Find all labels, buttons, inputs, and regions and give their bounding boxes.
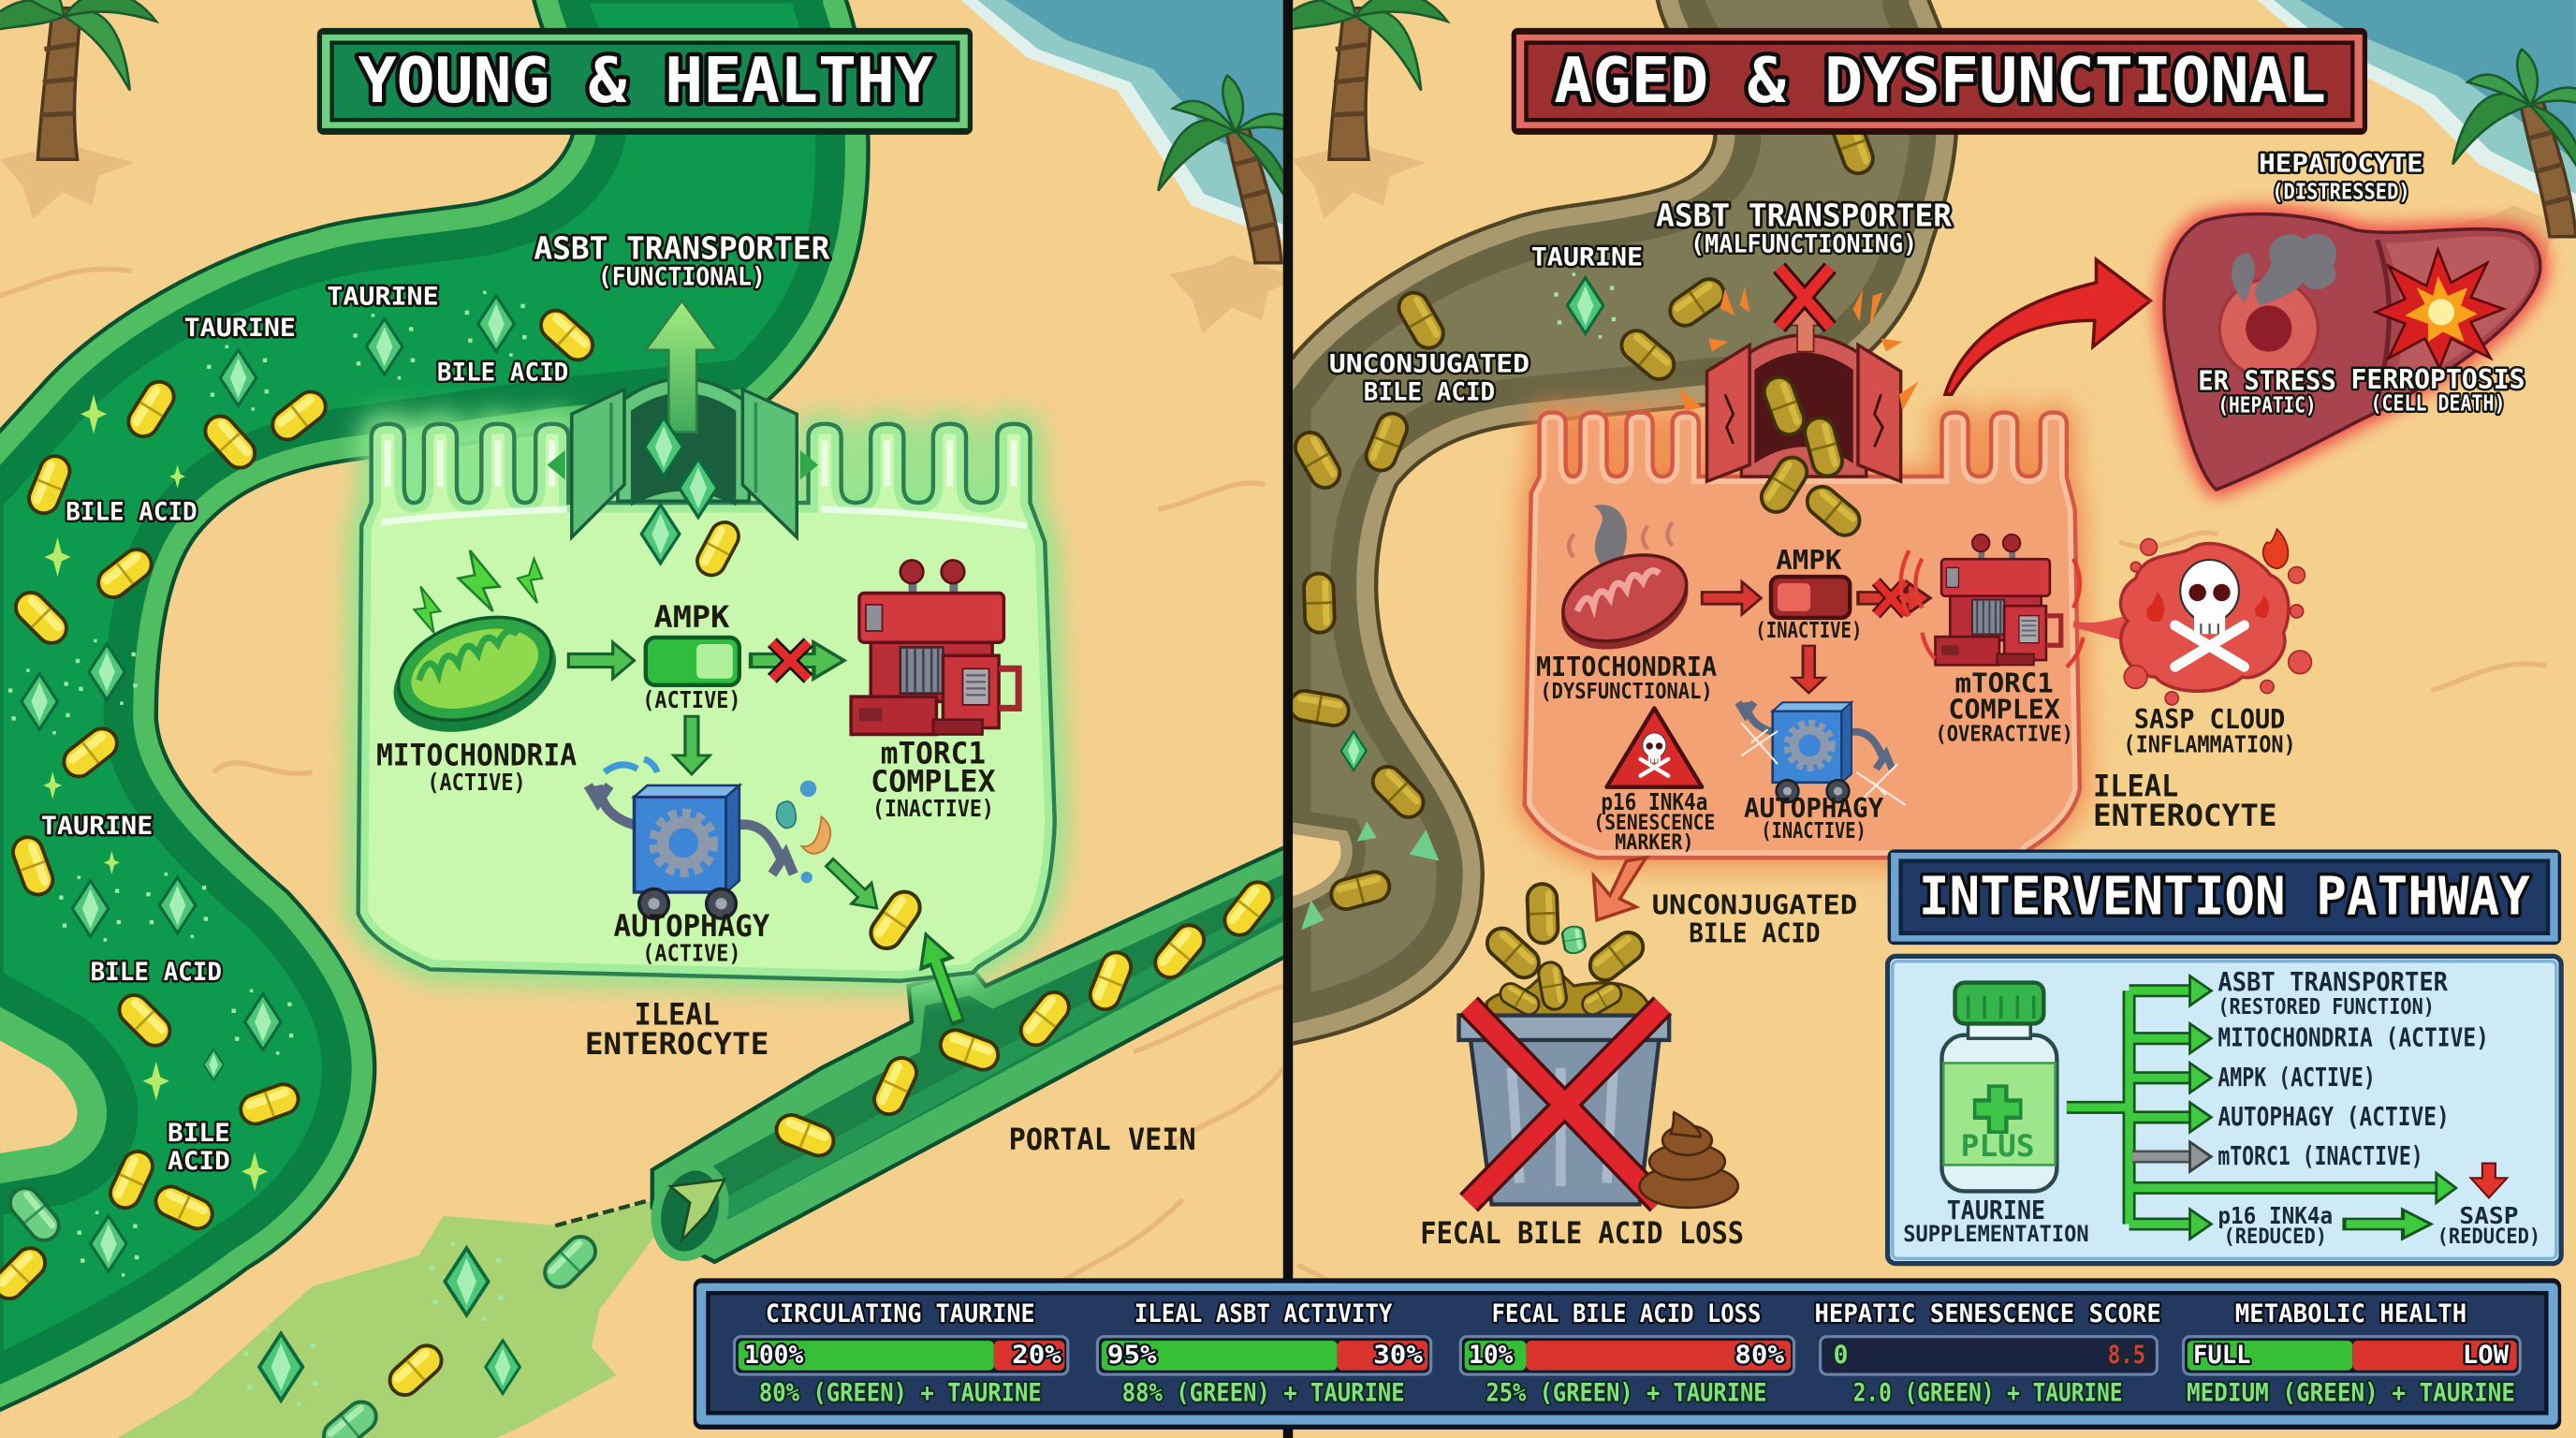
text: ileal enterocyte <box>588 1002 768 1054</box>
text: taurine supplementation: SUPPLEMENTATION <box>1903 1221 2089 1247</box>
arrow: weak mitochondria to AMPK <box>1702 581 1761 614</box>
text: ileal enterocyte: ENTEROCYTE <box>2093 800 2277 833</box>
splash contents <box>243 1230 602 1438</box>
text: autophagy inactive <box>1744 793 1883 844</box>
panel: intervention pathway <box>1888 956 2561 1264</box>
falling capsules <box>1481 884 1649 986</box>
metric: hepatic senescence score <box>1814 1300 2161 1407</box>
lumen labels <box>1329 197 1953 406</box>
panel: young and healthy <box>0 0 1305 1438</box>
arrow: AMPK to autophagy <box>1793 646 1825 693</box>
text: mTORC1 complex inactive <box>871 738 996 822</box>
metric: fecal bile acid loss: 10% <box>1469 1342 1514 1370</box>
text: autophagy active: (ACTIVE) <box>642 939 741 966</box>
text: mTORC1 complex overactive: mTORC1 <box>1955 668 2054 699</box>
arrow: unconjugated bile acid exits <box>1593 858 1647 920</box>
pathway targets: (REDUCED) <box>2437 1225 2540 1249</box>
text: unconjugated bile acid: UNCONJUGATED <box>1652 890 1857 921</box>
metric: hepatic senescence score: 8.5 <box>2108 1342 2145 1370</box>
text: fecal bile acid loss: FECAL BILE ACID LOSS <box>1420 1217 1744 1251</box>
metric: fecal bile acid loss: FECAL BILE ACID LOSS <box>1492 1300 1761 1328</box>
lumen labels: BILE ACID <box>1364 378 1495 406</box>
bile acid capsules and taurine crystals in lumen <box>0 291 599 1305</box>
arrows: door sides <box>547 450 565 479</box>
panel: aged and dysfunctional <box>1293 0 2576 1279</box>
text: mTORC1 complex inactive: mTORC1 <box>881 738 986 771</box>
icon: trash can with red X <box>1459 961 1669 1204</box>
title: aged and dysfunctional: AGED & DYSFUNCTIONAL <box>1554 44 2326 117</box>
ocean <box>961 0 1298 246</box>
pathway targets: MITOCHONDRIA (ACTIVE) <box>2217 1024 2489 1053</box>
metric: ileal ASBT activity: 95% <box>1107 1342 1157 1370</box>
small intestine lumen: green river <box>0 0 869 1438</box>
lumen labels: BILE ACID <box>66 499 198 527</box>
liver labels: (CELL DEATH) <box>2371 392 2505 417</box>
metric: circulating taurine <box>735 1300 1068 1407</box>
lumen labels: (FUNCTIONAL) <box>598 264 766 292</box>
text: ileal enterocyte <box>2093 770 2277 833</box>
heading: intervention pathway: INTERVENTION PATHWAY <box>1919 867 2530 928</box>
text: p16 senescence marker <box>1593 788 1715 855</box>
liver labels: (HEPATIC) <box>2217 393 2317 418</box>
portal vein <box>647 842 1298 1264</box>
arrow: AMPK blocks mTORC1 <box>751 642 844 679</box>
text: taurine supplementation: TAURINE <box>1947 1196 2045 1225</box>
text: mitochondria dysfunctional: MITOCHONDRIA <box>1536 652 1717 682</box>
text: unconjugated bile acid <box>1652 890 1857 948</box>
lumen labels: ASBT TRANSPORTER <box>1656 197 1953 233</box>
icon: taurine bottle: PLUS <box>1961 1130 2035 1164</box>
metric: ileal ASBT activity: 30% <box>1373 1342 1423 1370</box>
lumen labels: TAURINE <box>327 284 439 312</box>
text: p16 senescence marker: (SENESCENCE <box>1593 812 1715 835</box>
lumen labels: ASBT TRANSPORTER <box>534 230 830 267</box>
icon: stool pile <box>1640 1112 1738 1208</box>
icon: ER stress smoke and cell <box>2219 234 2336 378</box>
pathway targets: (REDUCED) <box>2223 1225 2327 1249</box>
text: p16 senescence marker: p16 INK4a <box>1601 788 1707 815</box>
lumen labels: (MALFUNCTIONING) <box>1690 230 1917 258</box>
liver labels: HEPATOCYTE <box>2259 151 2423 179</box>
liver labels: ER STRESS <box>2198 366 2336 397</box>
AMPK active switch: AMPK <box>654 601 729 635</box>
lumen labels: BILE <box>168 1120 230 1148</box>
ASBT transporter: broken door <box>1679 268 1919 541</box>
sand texture <box>0 269 1283 1314</box>
capsules in portal vein <box>772 876 1279 1160</box>
arrow: up through transporter <box>646 301 718 433</box>
palm tree: top left <box>0 0 156 218</box>
metric: hepatic senescence score: 0 <box>1834 1342 1848 1370</box>
AMPK active switch: (ACTIVE) <box>642 686 741 713</box>
icon: autophagy robot active <box>588 759 830 918</box>
icon: inactive autophagy robot <box>1738 702 1906 805</box>
text: autophagy active <box>614 914 769 964</box>
palm tree: right <box>2452 47 2576 257</box>
pathway targets: AUTOPHAGY (ACTIVE) <box>2217 1103 2450 1132</box>
title: young and healthy <box>317 28 973 135</box>
arrow: blocked to mTORC1 <box>1858 581 1930 614</box>
pathway targets: SASP <box>2459 1202 2519 1229</box>
text: mTORC1 complex overactive: COMPLEX <box>1949 695 2060 726</box>
AMPK inactive switch <box>1755 545 1862 643</box>
lumen labels: UNCONJUGATED <box>1329 351 1530 379</box>
palm tree: right <box>1157 73 1283 333</box>
lumen labels: BILE ACID <box>91 959 222 987</box>
taurine splash entering portal vein <box>118 1198 654 1438</box>
arrows: pathway branches <box>2067 976 2507 1239</box>
metric: hepatic senescence score: 2.0 (GREEN) + TAURINE <box>1853 1379 2123 1407</box>
sand texture <box>1297 530 2547 1279</box>
text: SASP cloud: (INFLAMMATION) <box>2123 731 2296 758</box>
liver labels <box>2198 151 2525 418</box>
metric: ileal ASBT activity: ILEAL ASBT ACTIVITY <box>1134 1300 1393 1328</box>
pathway targets: (RESTORED FUNCTION) <box>2217 995 2435 1020</box>
text: mTORC1 complex inactive: (INACTIVE) <box>872 795 994 822</box>
AMPK inactive switch: (INACTIVE) <box>1755 619 1862 643</box>
icon: p16 warning triangle <box>1606 708 1702 787</box>
text: ileal enterocyte: ENTEROCYTE <box>585 1028 768 1062</box>
title: young and healthy: YOUNG & HEALTHY <box>359 44 933 117</box>
panel: metrics bar <box>694 1278 2561 1430</box>
pathway targets: AMPK (ACTIVE) <box>2217 1064 2376 1093</box>
text: unconjugated bile acid: BILE ACID <box>1689 917 1821 948</box>
icon: red X <box>1779 268 1830 327</box>
text: mTORC1 complex inactive: COMPLEX <box>871 765 996 799</box>
microvilli highlights <box>381 440 1027 526</box>
metric: metabolic health: METABOLIC HEALTH <box>2235 1300 2466 1328</box>
arrow: mitochondria to AMPK <box>568 642 634 679</box>
AMPK active switch <box>642 601 741 713</box>
liver: glow <box>2164 214 2540 490</box>
SASP cloud <box>2073 529 2311 705</box>
text: p16 senescence marker: MARKER) <box>1615 831 1693 855</box>
text: mitochondria dysfunctional: (DYSFUNCTIONAL) <box>1540 680 1713 704</box>
metric: circulating taurine: 20% <box>1012 1342 1061 1370</box>
text: ileal enterocyte: ILEAL <box>2093 770 2178 804</box>
text: mTORC1 complex overactive <box>1935 668 2073 746</box>
capsules and shards in olive lumen <box>1287 111 1877 930</box>
lumen labels: TAURINE <box>1531 244 1643 272</box>
enterocyte cell: body <box>359 424 1055 981</box>
text: mitochondria active: MITOCHONDRIA <box>376 739 577 772</box>
metric: circulating taurine: 100% <box>744 1342 803 1370</box>
metric: fecal bile acid loss: 80% <box>1734 1342 1784 1370</box>
enterocyte cell: glow <box>1525 413 2080 858</box>
text: mitochondria dysfunctional <box>1536 652 1717 704</box>
icon: mTORC1 overactive machine <box>1901 535 2083 668</box>
lumen labels: ACID <box>168 1148 230 1176</box>
lumen labels: TAURINE <box>41 813 153 841</box>
metric: circulating taurine: 80% (GREEN) + TAURINE <box>759 1379 1042 1407</box>
metric: ileal ASBT activity: 88% (GREEN) + TAURINE <box>1122 1379 1405 1407</box>
text: SASP cloud: SASP CLOUD <box>2134 704 2285 735</box>
text: portal vein: PORTAL VEIN <box>1009 1123 1196 1157</box>
title: aged and dysfunctional <box>1512 28 2367 135</box>
icon: taurine bottle <box>1942 983 2056 1191</box>
ASBT transporter door: open <box>547 301 818 580</box>
pathway targets <box>2217 968 2540 1249</box>
text: ileal enterocyte: ILEAL <box>634 999 720 1033</box>
lumen labels <box>41 230 830 1176</box>
icon: active mitochondria <box>393 550 556 732</box>
sparks <box>1679 286 1919 411</box>
metric: metabolic health <box>2183 1300 2520 1407</box>
enterocyte cell: body <box>1525 413 2080 858</box>
pathway targets: p16 INK4a <box>2217 1202 2333 1229</box>
icon: ferroptosis explosion <box>2376 250 2504 368</box>
metric: metabolic health: FULL <box>2193 1342 2250 1370</box>
arrow: AMPK to autophagy <box>674 716 710 774</box>
dysfunctional lumen: olive river <box>1265 0 1957 1060</box>
pathway targets: mTORC1 (INACTIVE) <box>2217 1142 2423 1171</box>
palm tree: top left <box>1293 0 1451 219</box>
text: autophagy inactive: AUTOPHAGY <box>1744 793 1883 824</box>
enterocyte cell: glow <box>359 424 1055 981</box>
icon: mTORC1 inactive machine <box>851 560 1018 734</box>
liver labels: (DISTRESSED) <box>2272 180 2410 204</box>
text: mitochondria active <box>377 743 577 794</box>
text: autophagy inactive: (INACTIVE) <box>1761 819 1866 844</box>
pathway targets: ASBT TRANSPORTER <box>2217 968 2449 997</box>
text: taurine supplementation <box>1903 1196 2089 1247</box>
heading: intervention pathway <box>1888 849 2561 945</box>
metric: ileal ASBT activity <box>1097 1300 1431 1407</box>
arrow: curved red to liver <box>1945 259 2150 394</box>
ocean <box>2257 0 2576 213</box>
lumen labels: BILE ACID <box>437 359 568 387</box>
metric: fecal bile acid loss <box>1460 1300 1794 1407</box>
text: autophagy active: AUTOPHAGY <box>614 910 769 944</box>
AMPK inactive switch: AMPK <box>1776 545 1842 576</box>
icon: dysfunctional mitochondria <box>1549 505 1701 666</box>
metric: circulating taurine: CIRCULATING TAURINE <box>766 1300 1035 1328</box>
metric: metabolic health: LOW <box>2463 1342 2509 1370</box>
bile acid capsule in cell <box>869 889 922 950</box>
text: SASP cloud <box>2123 704 2296 758</box>
metric: metabolic health: MEDIUM (GREEN) + TAURINE <box>2187 1379 2515 1407</box>
lumen labels: TAURINE <box>184 315 296 343</box>
liver labels: FERROPTOSIS <box>2351 364 2525 395</box>
metric: hepatic senescence score: HEPATIC SENESCENCE SCORE <box>1814 1300 2161 1328</box>
arrow: portal vein to cell <box>919 931 965 1026</box>
liver: distressed hepatocyte <box>2164 214 2540 490</box>
text: mitochondria active: (ACTIVE) <box>427 769 526 796</box>
arrow: autophagy to bile acid <box>824 858 879 910</box>
text: mTORC1 complex overactive: (OVERACTIVE) <box>1935 722 2073 746</box>
metric: fecal bile acid loss: 25% (GREEN) + TAURINE <box>1486 1379 1767 1407</box>
central divider <box>1283 0 1293 1438</box>
